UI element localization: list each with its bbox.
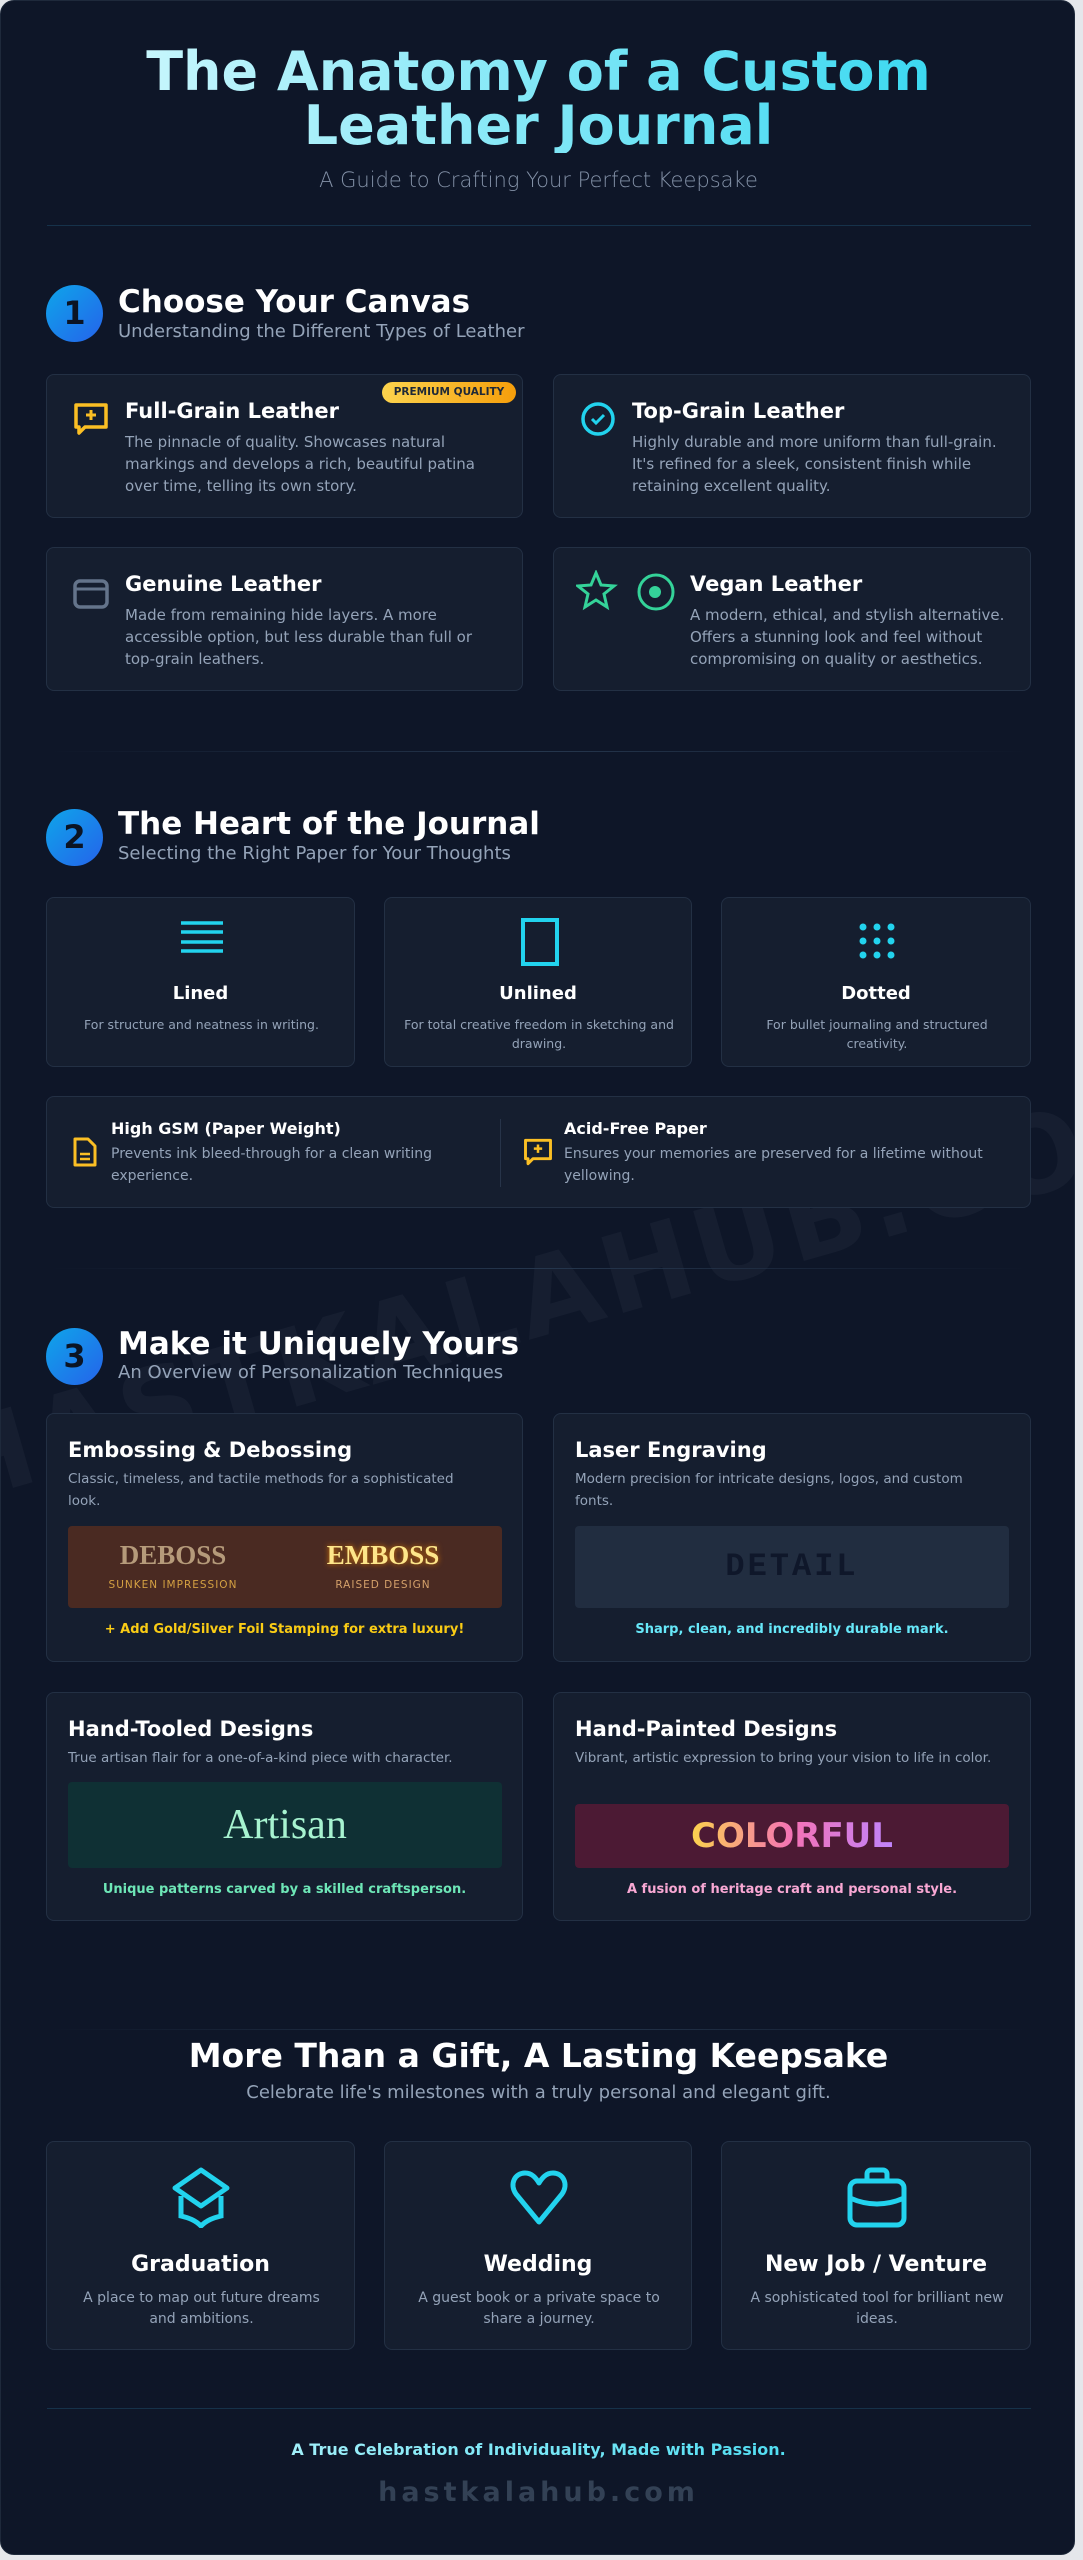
- section 2 header: Selecting the Right Paper for Your Thoughts: [118, 843, 511, 864]
- card: hand-painted: Hand-Painted Designs: [575, 1717, 837, 1741]
- card: laser: Laser Engraving: [575, 1438, 767, 1462]
- demo: artisan: [68, 1782, 502, 1868]
- card: graduation: A place to map out future dreams and ambitions.: [83, 2290, 320, 2327]
- badge: premium: PREMIUM QUALITY: [394, 386, 504, 398]
- card: hand-tooled: Unique patterns carved by a skilled craftsperson.: [103, 1882, 466, 1897]
- card: embossing: Embossing & Debossing: [68, 1438, 352, 1462]
- card: full-grain: The pinnacle of quality. Showcases natural markings and develops a rich, beautiful patina over time, telling its own story.: [125, 433, 475, 495]
- icon: vegan: [576, 570, 674, 610]
- card: genuine: [46, 547, 523, 691]
- footer tagline: A True Celebration of Individuality, Made with Passion.: [291, 2440, 786, 2459]
- card: hand-tooled: [46, 1692, 523, 1921]
- card: genuine: Made from remaining hide layers. A more accessible option, but less durable than full or top-grain leathers.: [125, 606, 472, 668]
- card: full-grain: Full-Grain Leather: [125, 399, 339, 423]
- panel: paper features: High GSM (Paper Weight): [111, 1119, 341, 1138]
- demo: detail: DETAIL: [725, 1548, 859, 1585]
- card: embossing: [46, 1413, 523, 1662]
- section 3 header: Make it Uniquely Yours: [118, 1326, 519, 1362]
- icon: briefcase: [848, 2168, 906, 2228]
- section 1 header: Understanding the Different Types of Leather: [118, 321, 524, 342]
- subtitle: A Guide to Crafting Your Perfect Keepsake: [319, 168, 758, 192]
- card: laser: Modern precision for intricate designs, logos, and custom fonts.: [575, 1471, 963, 1508]
- demo: colorful: COLORFUL: [691, 1816, 893, 1856]
- card: vegan: A modern, ethical, and stylish alternative. Offers a stunning look and feel without compromising on quality or aesthetics.: [690, 606, 1004, 668]
- icon: wallet: [73, 579, 109, 609]
- card: laser: Sharp, clean, and incredibly durable mark.: [635, 1622, 949, 1637]
- card: hand-tooled: True artisan flair for a one-of-a-kind piece with character.: [68, 1750, 453, 1766]
- card: embossing: + Add Gold/Silver Foil Stamping for extra luxury!: [105, 1622, 464, 1637]
- card: genuine: Genuine Leather: [125, 572, 321, 596]
- panel: paper features: [46, 1096, 1031, 1208]
- section 1 header: Choose Your Canvas: [118, 284, 470, 320]
- icon: blank page: [521, 918, 559, 966]
- card: top-grain: [553, 374, 1031, 518]
- demo: deboss/emboss: DEBOSS: [120, 1540, 226, 1570]
- title: The Anatomy of a Custom: [146, 40, 931, 103]
- card: hand-painted: A fusion of heritage craft and personal style.: [627, 1882, 957, 1897]
- card: laser: [553, 1413, 1031, 1662]
- card: dotted: Dotted: [841, 983, 911, 1004]
- card: graduation: [46, 2141, 355, 2350]
- section 3 header: [46, 1326, 519, 1385]
- icon: graduation cap: [172, 2168, 230, 2228]
- card: unlined: [384, 897, 692, 1067]
- footer brand: hastkalahub.com: [378, 2477, 699, 2508]
- panel: paper features: Prevents ink bleed-through for a clean writing experience.: [111, 1146, 432, 1184]
- card: graduation: Graduation: [131, 2252, 270, 2277]
- card: vegan: [553, 547, 1031, 691]
- card: unlined: For total creative freedom in sketching and drawing.: [404, 1017, 674, 1051]
- section 3 header: 3: [63, 1337, 86, 1375]
- card: lined: [46, 897, 355, 1067]
- card: embossing: Classic, timeless, and tactile methods for a sophisticated look.: [68, 1471, 454, 1508]
- card: hand-painted: Vibrant, artistic expression to bring your vision to life in color.: [575, 1750, 991, 1766]
- demo: deboss/emboss: EMBOSS: [327, 1540, 439, 1570]
- section 1 header: 1: [63, 294, 86, 332]
- card: wedding: A guest book or a private space to share a journey.: [418, 2290, 660, 2327]
- icon: heart: [510, 2170, 568, 2224]
- panel: paper features: Acid-Free Paper: [564, 1119, 707, 1138]
- card: new job: [721, 2141, 1031, 2350]
- section 2 header: [46, 806, 540, 866]
- icon: lines: [181, 921, 223, 953]
- demo: detail: [575, 1526, 1009, 1608]
- icon: full-grain: [74, 403, 108, 435]
- card: dotted: [721, 897, 1031, 1067]
- icon: check circle: [581, 402, 615, 436]
- card: new job: New Job / Venture: [765, 2252, 987, 2277]
- card: lined: For structure and neatness in writing.: [84, 1017, 319, 1032]
- icon: dots: [860, 924, 894, 958]
- section 1 header: [46, 284, 524, 342]
- section 3 header: An Overview of Personalization Techniques: [118, 1362, 503, 1383]
- demo: deboss/emboss: SUNKEN IMPRESSION: [109, 1579, 237, 1591]
- card: hand-tooled: Hand-Tooled Designs: [68, 1717, 313, 1741]
- card: vegan: Vegan Leather: [690, 572, 862, 596]
- card: new job: A sophisticated tool for brilliant new ideas.: [750, 2290, 1004, 2327]
- card: full-grain: [46, 374, 523, 518]
- demo: deboss/emboss: [68, 1526, 502, 1608]
- card: unlined: Unlined: [499, 983, 577, 1004]
- card: hand-painted: [553, 1692, 1031, 1921]
- icon: acid-free: [524, 1138, 552, 1166]
- demo: colorful: [575, 1804, 1009, 1868]
- card: lined: Lined: [173, 983, 228, 1004]
- section 4 subtitle: Celebrate life's milestones with a truly personal and elegant gift.: [246, 2082, 831, 2103]
- footer tagline: [1, 2440, 1076, 2459]
- title: Leather Journal: [304, 94, 773, 157]
- section 4 heading: More Than a Gift, A Lasting Keepsake: [189, 2036, 888, 2075]
- card: dotted: For bullet journaling and structured creativity.: [766, 1017, 988, 1051]
- card: top-grain: Highly durable and more uniform than full-grain. It's refined for a sleek, consistent finish while retaining excellent quality.: [632, 433, 997, 495]
- demo: deboss/emboss: RAISED DESIGN: [335, 1579, 431, 1591]
- badge: premium: [382, 382, 516, 403]
- card: wedding: Wedding: [484, 2252, 592, 2277]
- panel: paper features: Ensures your memories are preserved for a lifetime without yellowing.: [564, 1146, 983, 1184]
- card: wedding: [384, 2141, 692, 2350]
- demo: artisan: Artisan: [223, 1802, 347, 1848]
- section 2 header: The Heart of the Journal: [118, 806, 540, 842]
- section 2 header: 2: [63, 818, 86, 856]
- card: top-grain: Top-Grain Leather: [632, 399, 844, 423]
- title: [1, 45, 1076, 153]
- icon: document: [74, 1138, 96, 1166]
